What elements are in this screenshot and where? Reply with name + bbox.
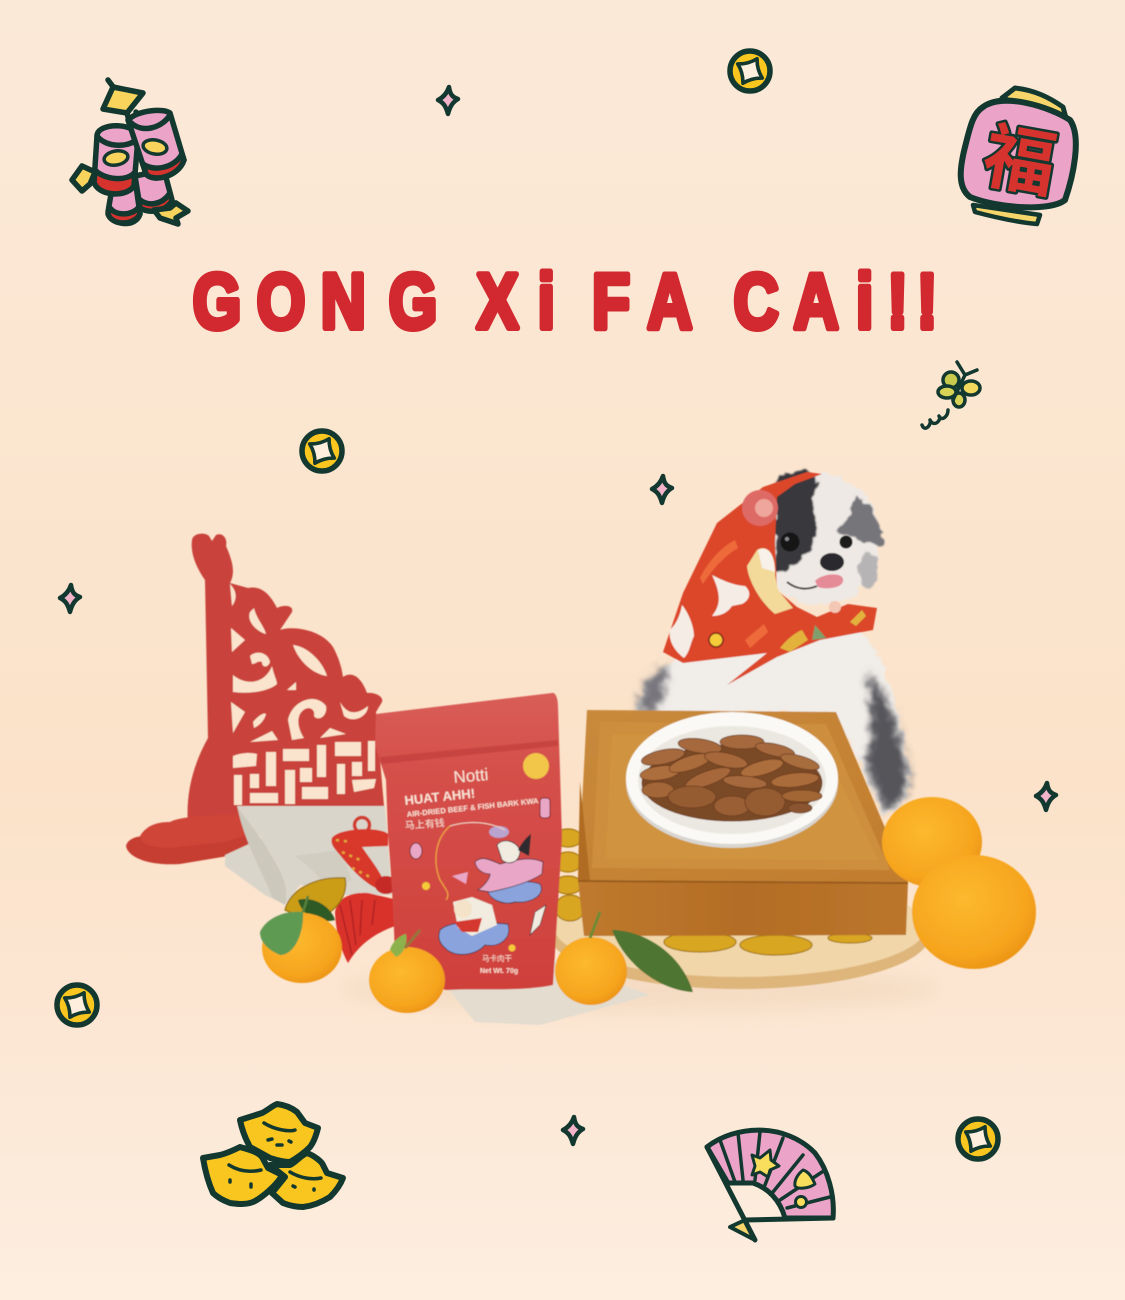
dog (636, 473, 910, 812)
white bowl (626, 712, 838, 848)
icon: lantern with fu character (961, 88, 1076, 224)
icon: butterfly (922, 362, 980, 428)
icon: sparkle right (1036, 783, 1056, 810)
bandana scarf (663, 472, 877, 685)
wooden box stand (578, 710, 908, 936)
dog body fur (636, 626, 910, 812)
chinese knot and tassel (331, 818, 398, 963)
dog face (780, 532, 852, 589)
icon: sparkle centre (652, 476, 672, 503)
treat pouch (375, 693, 562, 990)
icon: sparkle left (60, 585, 80, 612)
dried fish bark treats (639, 735, 822, 821)
floor shadow (340, 968, 940, 1012)
linen cloth (225, 806, 650, 1025)
pouch illustration: pink horse and cat (475, 826, 543, 903)
round bamboo tray (550, 877, 930, 989)
icon: sparkle bottom (563, 1117, 583, 1144)
pouch chinese name: 马上有钱 (404, 816, 445, 832)
gold coins on tray (554, 829, 872, 955)
pouch heading: HUAT AHH! (404, 786, 476, 808)
gold ingot (285, 878, 346, 915)
dog head (760, 474, 880, 606)
orange small left (260, 896, 342, 983)
screen base (126, 815, 262, 864)
orange front centre (369, 930, 445, 1013)
pouch illustration: corgi on cloud (439, 897, 509, 954)
red felt screen (188, 534, 384, 825)
icon: sparkle top (438, 87, 458, 114)
pouch brand: Notti (453, 765, 489, 787)
icon: pink folding fan (707, 1130, 833, 1240)
big oranges (882, 797, 1036, 969)
title: GONG Xi FA CAi!! (193, 257, 938, 345)
icon: coin top (730, 51, 770, 91)
icon: coin lower left (57, 985, 97, 1025)
icon: coin middle left (302, 431, 342, 471)
pouch illustration: small motifs (410, 798, 550, 952)
orange front right with leaf (555, 912, 693, 1005)
pouch net weight: Net Wt. 70g (480, 968, 518, 975)
icon: gold ingots (203, 1104, 343, 1207)
photo scene (126, 472, 1036, 1025)
icon: coin lower right (958, 1119, 998, 1159)
pouch footer chinese: 马卡肉干 (482, 953, 512, 963)
icon: firecrackers (72, 80, 188, 224)
fu character: 福 (977, 116, 1062, 208)
pouch subtitle: AIR-DRIED BEEF & FISH BARK KWA (406, 796, 539, 819)
